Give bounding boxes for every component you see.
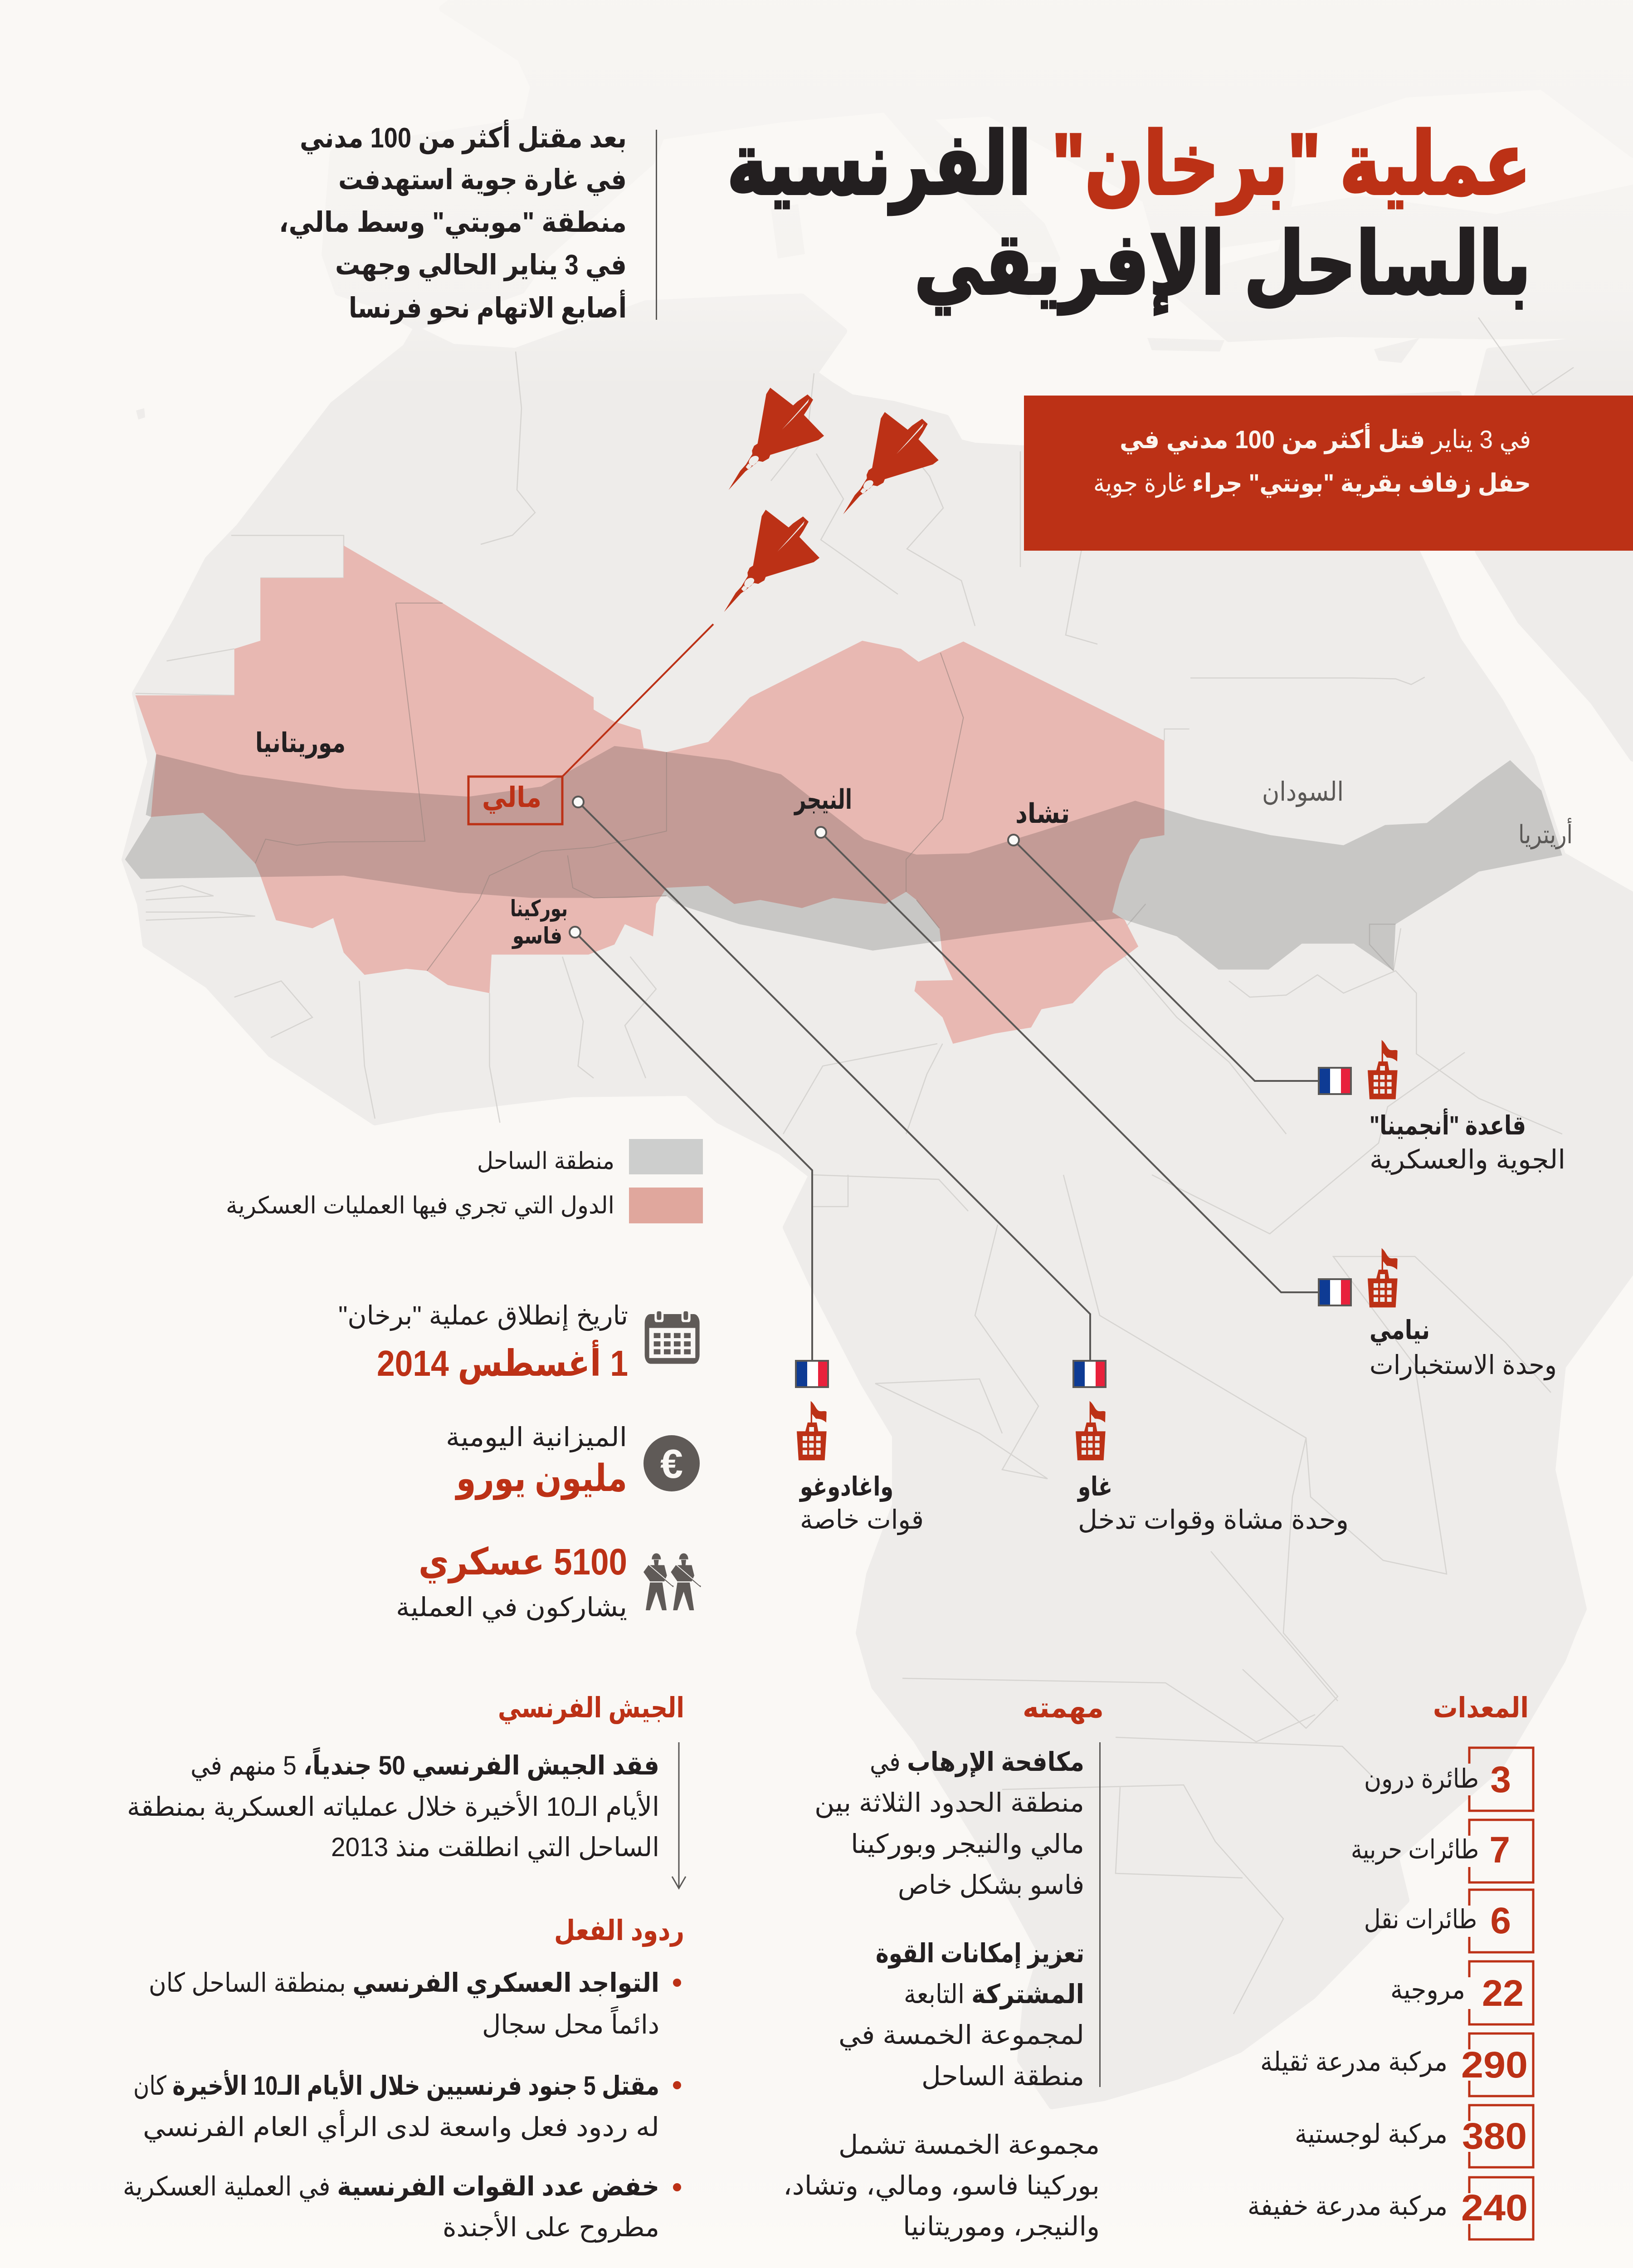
map labels xyxy=(255,728,1573,949)
red callout banner: في 3 يناير قتل أكثر من 100 مدني في xyxy=(1120,423,1531,455)
base captions: الجوية والعسكرية xyxy=(1370,1145,1565,1175)
flag: N'Djamena xyxy=(1318,1067,1352,1095)
map labels: النيجر xyxy=(794,784,852,816)
mission text: لمجموعة الخمسة في xyxy=(838,2020,1084,2051)
stat: daily budget: مليون يورو xyxy=(455,1458,627,1501)
equipment numbers xyxy=(1461,1759,1528,2229)
title: الفرنسية xyxy=(727,116,1031,215)
stat: daily budget: الميزانية اليومية xyxy=(446,1422,627,1453)
stat: start date: 1 أغسطس 2014 xyxy=(377,1340,628,1384)
Sahel band xyxy=(125,746,1562,971)
intro text block: في 3 يناير الحالي وجهت xyxy=(335,249,627,281)
intro text block: بعد مقتل أكثر من 100 مدني xyxy=(300,119,627,154)
flag: Gao xyxy=(1072,1360,1107,1388)
title: عملية "برخان" xyxy=(1052,116,1531,215)
French bases: flags and building icons xyxy=(795,1040,1398,1460)
G5 note: بوركينا فاسو، ومالي، وتشاد، xyxy=(783,2171,1100,2201)
intro text block: أصابع الاتهام نحو فرنسا xyxy=(349,289,627,325)
equipment labels: طائرات نقل xyxy=(1364,1905,1477,1935)
stat: daily budget xyxy=(446,1422,700,1501)
icon: base building N'Djamena xyxy=(1368,1040,1398,1099)
red callout banner: حفل زفاف بقرية "بونتي" جراء غارة جوية xyxy=(1093,469,1531,498)
intro text block: في غارة جوية استهدفت xyxy=(338,164,627,196)
jet 2 xyxy=(843,412,939,514)
map labels: أريتريا xyxy=(1518,818,1573,850)
G5 note: والنيجر، وموريتانيا xyxy=(903,2212,1100,2242)
stat: start date xyxy=(338,1301,700,1384)
mission text: فاسو بشكل خاص xyxy=(898,1870,1084,1901)
reactions list: مطروح على الأجندة xyxy=(443,2211,659,2243)
panel: equipment xyxy=(1248,1692,1533,2239)
equipment numbers: 7 xyxy=(1489,1829,1510,1871)
leader lines xyxy=(575,802,1318,1360)
operation countries region xyxy=(136,546,1165,1044)
map labels: فاسو xyxy=(512,923,562,949)
army text xyxy=(127,1747,659,1863)
G5 note xyxy=(783,2130,1100,2242)
map labels: بوركينا xyxy=(510,896,568,922)
icon: base building Ouagadougou xyxy=(797,1401,827,1460)
equipment labels: طائرات حربية xyxy=(1351,1835,1479,1865)
legend: منطقة الساحل xyxy=(477,1148,614,1174)
equipment numbers: 6 xyxy=(1490,1900,1511,1941)
icon: soldiers xyxy=(643,1553,701,1610)
equipment numbers: 3 xyxy=(1490,1759,1511,1800)
equipment labels xyxy=(1248,1764,1479,2222)
flag: Niamey xyxy=(1318,1278,1352,1306)
mission text: مالي والنيجر وبوركينا xyxy=(851,1829,1084,1860)
heading: French army: الجيش الفرنسي xyxy=(498,1692,684,1724)
equipment boxes xyxy=(1469,1748,1533,2239)
equipment labels: مركبة مدرعة خفيفة xyxy=(1248,2191,1448,2222)
mission text: منطقة الحدود الثلاثة بين xyxy=(814,1788,1084,1818)
mission text: المشتركة التابعة xyxy=(904,1980,1084,2010)
legend xyxy=(226,1139,703,1223)
title xyxy=(727,116,1531,315)
flag: Ouagadougou xyxy=(795,1360,829,1388)
map labels: موريتانيا xyxy=(255,728,346,759)
equipment labels: مروجية xyxy=(1390,1975,1465,2005)
stat: troops: يشاركون في العملية xyxy=(396,1593,627,1623)
equipment labels: مركبة مدرعة ثقيلة xyxy=(1260,2047,1448,2077)
icon: euro coin: € xyxy=(660,1442,683,1487)
heading: equipment: المعدات xyxy=(1433,1692,1529,1724)
army text: الساحل التي انطلقت منذ 2013 xyxy=(331,1833,659,1863)
stat: start date: تاريخ إنطلاق عملية "برخان" xyxy=(338,1301,628,1331)
intro text block: منطقة "موبتي" وسط مالي، xyxy=(279,207,627,239)
fade over Europe xyxy=(0,0,1633,390)
map labels: تشاد xyxy=(1015,798,1070,829)
heading: mission: مهمته xyxy=(1023,1692,1104,1724)
reactions list: التواجد العسكري الفرنسي بمنطقة الساحل كان xyxy=(149,1968,659,1999)
base captions: واغادوغو xyxy=(799,1472,893,1502)
panel: French army xyxy=(123,1692,686,2243)
country border lines xyxy=(136,318,1574,2014)
mission text xyxy=(814,1747,1084,2091)
mission text: مكافحة الإرهاب في xyxy=(870,1747,1084,1778)
base captions xyxy=(799,1108,1565,1535)
base captions: نيامي xyxy=(1370,1315,1430,1345)
map labels: مالي xyxy=(482,782,541,814)
base captions: وحدة الاستخبارات xyxy=(1370,1350,1557,1381)
equipment numbers: 380 xyxy=(1462,2116,1527,2157)
army text: فقد الجيش الفرنسي 50 جندياً، 5 منهم في xyxy=(190,1747,659,1781)
icon: base building Gao xyxy=(1076,1401,1106,1460)
equipment numbers: 290 xyxy=(1461,2044,1528,2086)
panel: mission xyxy=(783,1692,1104,2242)
stat: troops: 5100 عسكري xyxy=(419,1541,627,1584)
icon: calendar xyxy=(645,1311,700,1364)
heading: reactions: ردود الفعل xyxy=(554,1915,684,1947)
inner borders xyxy=(255,603,963,971)
icon: fighter jets xyxy=(724,388,939,612)
equipment numbers: 240 xyxy=(1461,2187,1528,2229)
reactions list: دائماً محل سجال xyxy=(482,2006,659,2039)
arrow xyxy=(672,1742,686,1888)
location dots xyxy=(570,797,1019,938)
mission text: تعزيز إمكانات القوة xyxy=(876,1939,1084,1969)
reactions list xyxy=(123,1968,681,2243)
icon: euro coin xyxy=(643,1435,700,1491)
flight path line and Mali highlight box xyxy=(468,624,713,824)
base captions: غاو xyxy=(1077,1472,1112,1502)
fade at page bottom xyxy=(0,2155,1633,2268)
jet 1 xyxy=(729,388,824,490)
reactions list: خفض عدد القوات الفرنسية في العملية العسكرية xyxy=(123,2172,659,2202)
jet 3 xyxy=(724,510,819,612)
red callout banner xyxy=(1024,396,1633,551)
reactions list: له ردود فعل واسعة لدى الرأي العام الفرنسي xyxy=(143,2110,659,2143)
map overlays xyxy=(125,546,1562,1044)
map labels: السودان xyxy=(1262,777,1344,807)
base captions: قاعدة "أنجمينا" xyxy=(1370,1108,1526,1140)
base captions: وحدة مشاة وقوات تدخل xyxy=(1078,1505,1349,1535)
intro text block xyxy=(279,119,657,325)
base captions: قوات خاصة xyxy=(800,1505,924,1535)
mission text: منطقة الساحل xyxy=(921,2062,1084,2091)
equipment labels: طائرة درون xyxy=(1364,1764,1479,1794)
reactions list: مقتل 5 جنود فرنسيين خلال الأيام الـ10 الأخيرة كان xyxy=(133,2070,659,2102)
icon: base building Niamey xyxy=(1368,1248,1398,1307)
army text: الأيام الـ10 الأخيرة خلال عملياته العسكرية بمنطقة xyxy=(127,1790,659,1823)
legend: الدول التي تجري فيها العمليات العسكرية xyxy=(226,1193,614,1219)
stat: troops xyxy=(396,1541,701,1623)
equipment labels: مركبة لوجستية xyxy=(1295,2119,1448,2150)
equipment numbers: 22 xyxy=(1482,1973,1524,2014)
G5 note: مجموعة الخمسة تشمل xyxy=(838,2130,1100,2160)
